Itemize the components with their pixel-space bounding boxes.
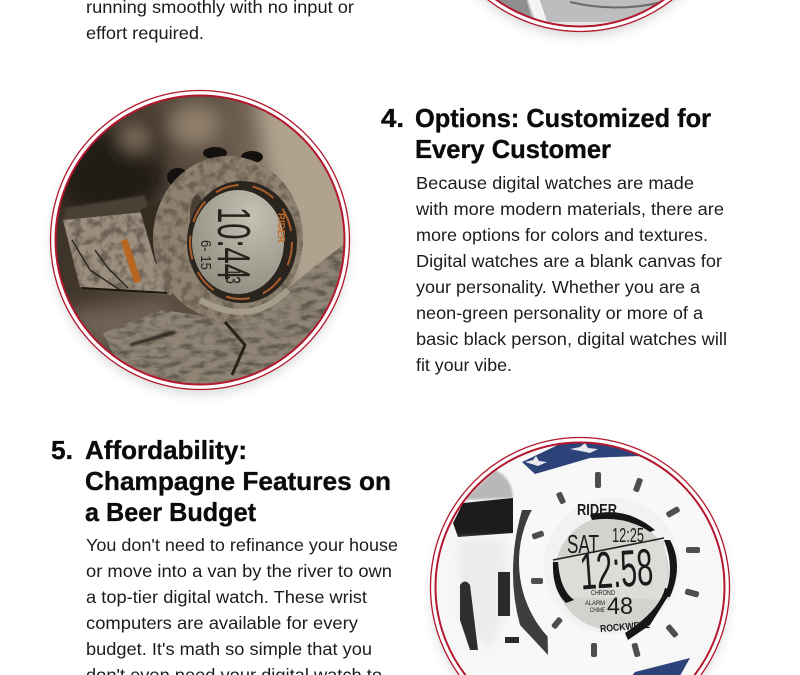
text block: item 4 body: more options for colors and textures. <box>416 225 708 245</box>
text block: item 4 body: your personality. Whether you are a <box>416 277 700 297</box>
text block: end of item 3: effort required. <box>86 23 204 43</box>
heading: item 4 options: Options: Customized for <box>415 103 711 133</box>
photo: white rider watch with flag strap: CHIME <box>590 608 605 614</box>
text block: end of item 3 <box>86 0 354 43</box>
bezel <box>519 457 614 637</box>
heading: item 4 options: 4. <box>381 103 404 133</box>
text block: item 4 body: basic black person, digital watches will <box>416 329 727 349</box>
text block: item 5 body: or move into a van by the river to own <box>86 561 392 581</box>
text block: item 4 body: with more modern materials, there are <box>415 199 724 219</box>
heading: item 5 affordability: Affordability: <box>85 435 247 465</box>
text block: item 4 body <box>415 173 727 375</box>
photo: top watch cropped circle <box>478 0 682 40</box>
pushers <box>167 168 186 184</box>
heading: item 5 affordability: a Beer Budget <box>85 497 256 527</box>
text block: item 5 body: budget. It's math so simple that you <box>86 639 372 659</box>
strap left shapes <box>463 470 513 500</box>
photo: camouflage watch on log: 13 <box>221 268 244 284</box>
bezel <box>153 156 303 320</box>
photo: white rider watch with flag strap <box>430 435 730 675</box>
text block: item 5 body <box>86 535 398 675</box>
face <box>544 498 680 634</box>
photo: white rider watch with flag strap: 12:58 <box>578 539 655 602</box>
text block: item 5 body: You don't need to refinance your house <box>86 535 398 555</box>
photo: camouflage watch on log <box>50 90 360 392</box>
flag <box>522 444 639 474</box>
photo: white rider watch with flag strap: CHRONO <box>591 590 615 597</box>
strap <box>64 194 148 220</box>
text block: item 5 body: computers are available for every <box>86 613 358 633</box>
photo: white rider watch with flag strap: SAT <box>567 529 599 559</box>
photo: white rider watch with flag strap: ALARM <box>585 601 605 607</box>
photo: white rider watch with flag strap: ROCKWELL <box>600 620 650 635</box>
photo: white rider watch with flag strap: 12:25 <box>612 525 644 547</box>
photo: white rider watch with flag strap: RIDER <box>577 502 617 519</box>
photo: white rider watch with flag strap: 48 <box>607 593 633 620</box>
log <box>103 245 344 384</box>
heading: item 5 affordability: 5. <box>51 435 73 465</box>
photo: camouflage watch on log: 6- 15 <box>197 240 214 270</box>
photo: camouflage watch on log: RIDER <box>275 213 286 244</box>
heading: item 5 affordability <box>51 435 391 527</box>
text block: item 4 body: Digital watches are a blank canvas for <box>416 251 722 271</box>
lcd face <box>192 190 284 294</box>
text block: item 4 body: Because digital watches are made <box>416 173 694 193</box>
heading: item 4 options <box>381 103 711 164</box>
heading: item 5 affordability: Champagne Features on <box>85 466 391 496</box>
heading: item 4 options: Every Customer <box>415 134 611 164</box>
photo: camouflage watch on log: 10:44 <box>208 207 260 280</box>
text block: item 4 body: fit your vibe. <box>416 355 512 375</box>
text block: item 4 body: neon-green personality or more of a <box>416 303 703 323</box>
text block: item 5 body: a top-tier digital watch. These wrist <box>86 587 367 607</box>
